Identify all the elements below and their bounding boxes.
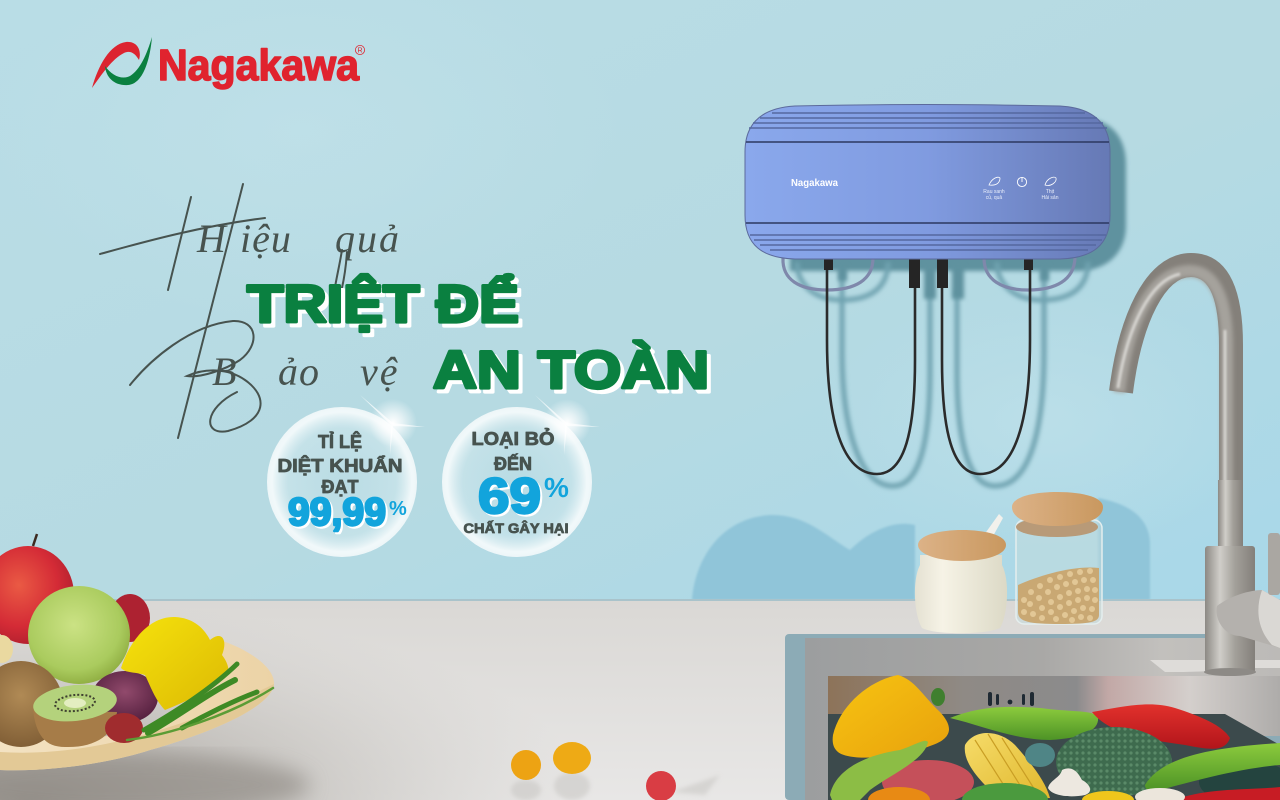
sink rim — [805, 638, 1280, 800]
tomato — [882, 760, 974, 800]
sparkle — [360, 395, 425, 455]
headline: Hiệu quả: H — [196, 216, 228, 261]
headline: Hiệu quả — [100, 184, 401, 438]
second mushroom — [1135, 788, 1185, 800]
stat value: 99,99 — [290, 493, 388, 536]
green chili right — [1145, 743, 1280, 791]
corn tip — [1082, 791, 1134, 800]
left chili — [830, 741, 928, 800]
kiwi half — [31, 681, 119, 747]
registered mark: R — [357, 48, 363, 54]
ceramic jar — [915, 514, 1007, 633]
star fruit — [121, 617, 228, 710]
stat value: 99,99 — [288, 491, 386, 534]
bubble text: DIỆT KHUẨN — [278, 455, 402, 476]
headline: Bảo vệ — [130, 321, 400, 432]
red tomato — [646, 771, 676, 800]
stat value: % — [389, 498, 407, 520]
green chili top — [950, 707, 1098, 740]
headline: Hiệu quả: iệu — [240, 216, 292, 261]
bubble text: LOẠI BỎ — [472, 428, 554, 449]
bowl shadow — [0, 753, 310, 800]
glass jar with beans — [1012, 492, 1103, 624]
bubble text: CHẤT GÂY HẠI — [464, 519, 568, 536]
wordmark: Nagakawa — [158, 41, 359, 90]
ribs — [749, 113, 1107, 250]
red apple — [0, 546, 74, 644]
mushroom — [1048, 768, 1090, 796]
stat value: % — [544, 472, 569, 503]
headline: AN TOÀN: AN TOÀN — [433, 340, 709, 400]
lettuce — [962, 783, 1048, 800]
control: meat: Thịt — [1046, 189, 1055, 195]
faucet spout — [1118, 265, 1231, 560]
green beans — [127, 664, 273, 740]
water — [828, 714, 1280, 800]
device body — [745, 104, 1110, 259]
control: vegetables: Rau xanh — [983, 189, 1005, 195]
red berry — [105, 713, 143, 743]
quince — [0, 635, 13, 663]
pumpkin — [1199, 760, 1280, 800]
overflow drain — [988, 692, 1034, 706]
control: power — [1017, 177, 1027, 187]
tomato shadows — [511, 772, 720, 800]
device plugs — [824, 259, 1033, 288]
control: meat — [1042, 177, 1059, 201]
background wall — [0, 0, 1280, 602]
device shadow — [790, 118, 1126, 486]
pepper stem — [931, 688, 945, 706]
vegetables — [830, 675, 1280, 800]
countertop — [0, 599, 1280, 800]
yellow tomato — [553, 742, 591, 774]
bubble text: ĐẠT — [322, 477, 358, 497]
sink frame — [785, 634, 1280, 800]
red pepper — [1092, 704, 1230, 749]
fruit bowl — [0, 534, 310, 800]
cables — [783, 258, 1075, 474]
bubble: 99,99% — [267, 395, 425, 557]
device brand: Nagakawa — [791, 177, 838, 189]
sparkle — [535, 395, 600, 455]
stat value: 69 — [478, 468, 541, 524]
stat value — [478, 468, 569, 526]
black power cords — [827, 265, 1030, 474]
device: Nagakawa purifier — [745, 104, 1110, 259]
bubble text — [278, 431, 402, 497]
sink — [785, 634, 1280, 800]
broccoli — [1056, 727, 1172, 797]
stem — [33, 534, 37, 546]
stat value: 69 — [480, 470, 543, 526]
control: vegetables: củ, quả — [986, 194, 1002, 201]
bubble: 69% — [442, 395, 600, 557]
logo — [92, 37, 365, 90]
plum — [92, 671, 158, 723]
orange — [868, 787, 930, 800]
red chili bottom — [1183, 787, 1280, 800]
bubble text: ĐẾN — [494, 453, 532, 474]
control: vegetables — [983, 177, 1005, 201]
jar shadows on wall — [692, 498, 1150, 600]
whole kiwi — [0, 661, 63, 747]
headline: Hiệu quả: quả — [335, 216, 401, 261]
headline: TRIỆT ĐỂ: TRIỆT ĐỂ — [247, 273, 519, 334]
yellow pepper — [833, 675, 949, 758]
headline: AN TOÀN: AN TOÀN — [437, 344, 713, 404]
control: meat: Hải sản — [1042, 195, 1059, 201]
bubble text: TỈ LỆ — [318, 431, 362, 452]
headline: TRIỆT ĐỂ: TRIỆT ĐỂ — [251, 277, 523, 338]
cherry tomatoes — [511, 742, 720, 800]
headline: Bảo vệ: B — [212, 349, 236, 394]
bowl — [0, 640, 274, 770]
lavender loops — [783, 258, 1075, 290]
yellow tomato — [511, 750, 541, 780]
green apple — [28, 586, 130, 684]
corn — [965, 733, 1050, 800]
icon: swoosh — [92, 37, 152, 88]
registered mark — [355, 45, 365, 55]
headline: Bảo vệ: ảo — [278, 349, 320, 394]
back apple — [110, 594, 150, 642]
headline: Bảo vệ: vệ — [360, 349, 400, 394]
bubble text — [464, 428, 568, 536]
faucet base — [1204, 480, 1280, 676]
tap deck — [1150, 660, 1280, 672]
sink inner wall — [828, 676, 1280, 736]
small broccoli — [1025, 743, 1055, 767]
